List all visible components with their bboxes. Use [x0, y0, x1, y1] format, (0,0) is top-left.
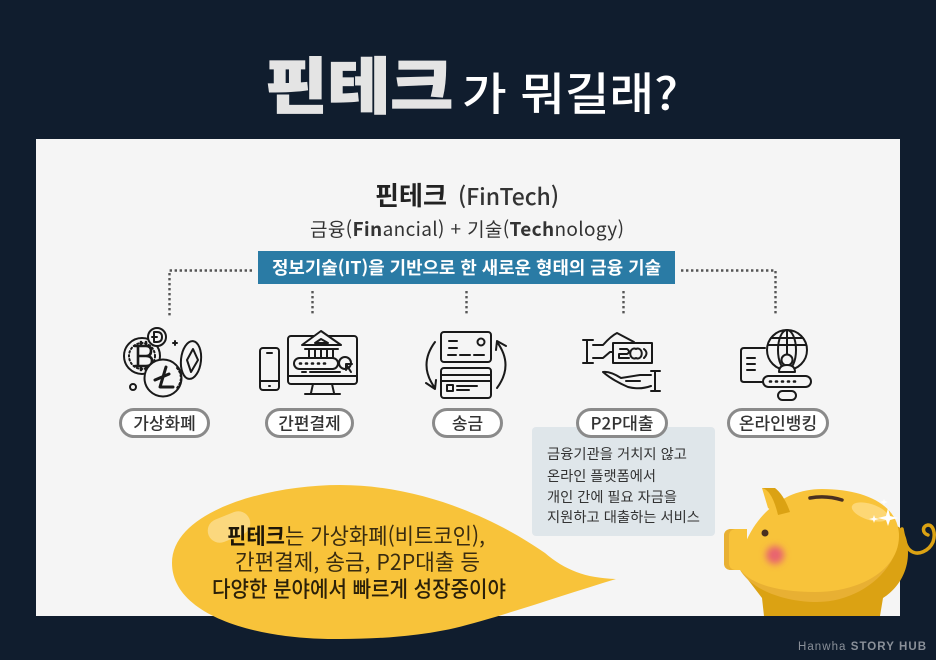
pill label: 송금: [434, 410, 502, 436]
speech bubble: 간편결제, 송금, P2P대출 등: [235, 545, 480, 577]
icon: P2P loan hands and banknote: [583, 333, 660, 391]
title: 핀테크: [265, 37, 453, 126]
info box: P2P description: [532, 427, 715, 536]
subheading: finance + technology: 금융(Financial) + 기술(Technology): [310, 215, 624, 242]
info box: P2P description: 개인 간에 필요 자금을: [547, 487, 677, 507]
icon: money transfer cards: [426, 332, 506, 398]
pill label: 가상화폐: 가상화폐: [133, 410, 196, 434]
footer logo: Hanwha STORY HUB: [798, 641, 926, 653]
pill label: 온라인뱅킹: 온라인뱅킹: [739, 410, 817, 434]
heading: fintech: (FinTech): [458, 178, 559, 212]
icon: online banking: [741, 330, 811, 400]
panel: main content: [36, 139, 900, 616]
speech bubble: [172, 485, 616, 639]
definition banner: 정보기술(IT)을 기반으로 한 새로운 형태의 금융 기술: [272, 255, 661, 280]
heading: fintech: 핀테크: [375, 176, 447, 213]
heading: fintech: [375, 176, 559, 213]
pill label: P2P대출: [578, 410, 666, 436]
pill label: 간편결제: 간편결제: [278, 410, 341, 434]
info box: P2P description: 금융기관을 거치지 않고: [547, 444, 687, 464]
title: 가 뭐길래?: [462, 58, 678, 123]
speech bubble: 핀테크는 가상화폐(비트코인),: [227, 519, 485, 551]
piggy bank: [724, 488, 934, 616]
definition banner: [258, 251, 675, 284]
dotted connectors: [170, 270, 776, 316]
icon: simple payment: [260, 331, 357, 394]
pill label: 송금: 송금: [452, 410, 483, 434]
info box: P2P description: 지원하고 대출하는 서비스: [547, 507, 700, 527]
pill label: 가상화폐: [120, 410, 208, 436]
icon: virtual currency coins: [124, 328, 203, 396]
title: [265, 37, 678, 126]
info box: P2P description: 온라인 플랫폼에서: [547, 466, 656, 486]
pill label: P2P대출: P2P대출: [590, 410, 654, 434]
pill label: 간편결제: [266, 410, 352, 436]
speech bubble: 다양한 분야에서 빠르게 성장중이야: [212, 572, 506, 604]
